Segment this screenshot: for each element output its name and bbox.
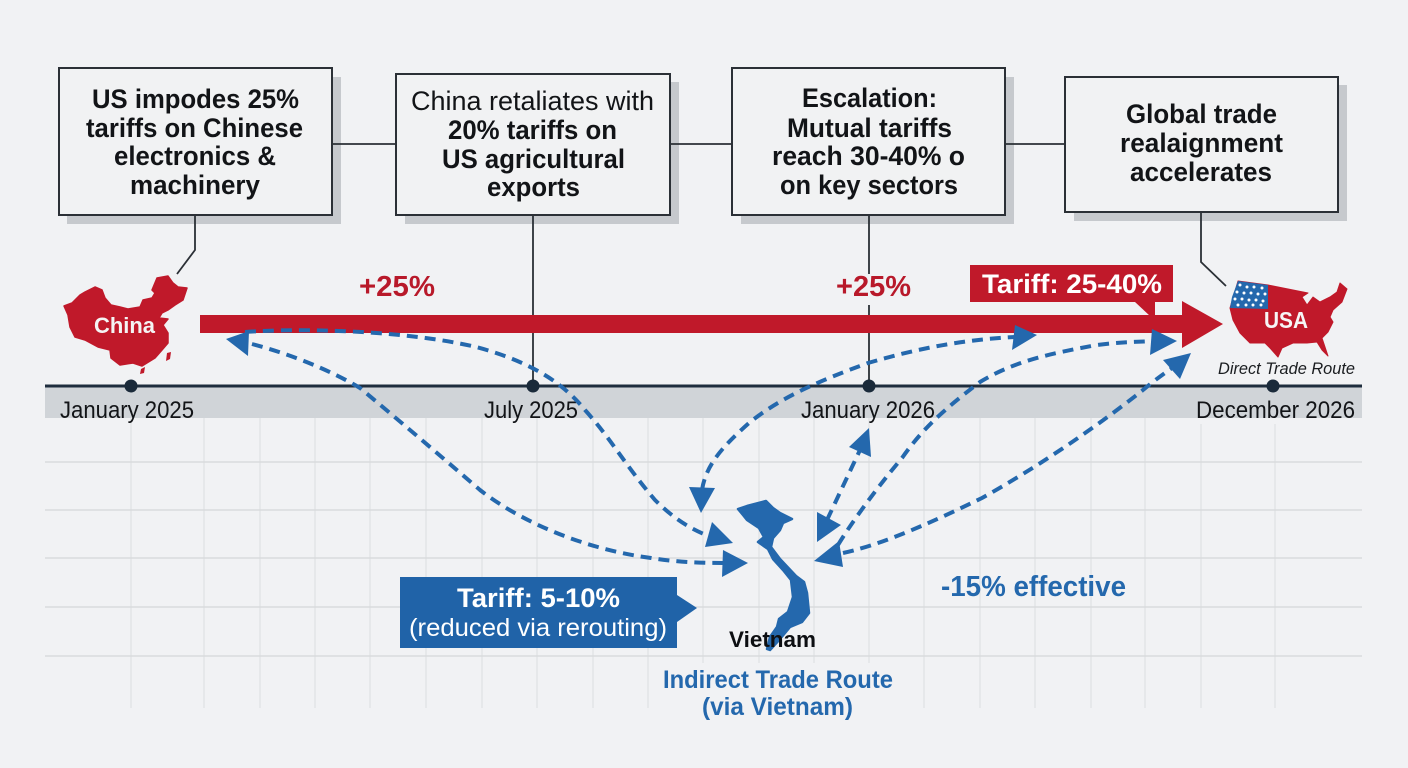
timeline label July 2025: July 2025	[484, 397, 578, 424]
event box 1: machinery	[130, 170, 260, 200]
timeline label December 2026: December 2026	[1196, 397, 1355, 424]
map: USA	[1230, 281, 1347, 357]
event box 2: exports	[487, 172, 580, 202]
tariff callout red	[970, 265, 1173, 316]
event box 1: US impodes 25%	[92, 84, 299, 114]
event box 3: on key sectors	[780, 170, 958, 200]
event box connectors	[177, 144, 1226, 380]
event box 3: reach 30-40% o	[772, 141, 965, 171]
indirect arrow: China to Vietnam lower	[252, 344, 748, 577]
event box 2: China retaliates with	[411, 86, 654, 116]
indirect arrow: Vietnam to direct route middle	[814, 329, 1177, 567]
event box 4: accelerates	[1130, 157, 1272, 187]
label: -15% effective: -15% effective	[941, 571, 1126, 603]
tariff callout red: Tariff: 25-40%	[982, 269, 1162, 299]
map: China: China	[94, 313, 156, 338]
label: direct trade route: Direct Trade Route	[1218, 360, 1355, 378]
label: Vietnam: Vietnam	[729, 627, 816, 652]
event box 1: electronics &	[114, 141, 276, 171]
timeline label January 2025: January 2025	[60, 397, 194, 424]
event box 1: tariffs on Chinese	[86, 113, 303, 143]
indirect arrow: Vietnam two-way short	[817, 428, 871, 542]
tariff callout blue	[400, 577, 697, 648]
event box 1	[59, 68, 341, 224]
event box 4: Global trade	[1126, 99, 1277, 129]
event box 3: Escalation:	[802, 83, 937, 113]
event box 2: 20% tariffs on	[448, 115, 617, 145]
event box 2: US agricultural	[442, 144, 625, 174]
indirect arrow: Vietnam to USA	[843, 353, 1191, 553]
event box 4	[1065, 77, 1347, 221]
timeline label January 2026: January 2026	[801, 397, 935, 424]
map: Vietnam	[738, 501, 809, 650]
event box 3: Mutual tariffs	[787, 113, 952, 143]
label: indirect trade route	[663, 666, 893, 721]
event box 2	[396, 74, 679, 224]
event box 3	[732, 68, 1014, 224]
map: China	[64, 276, 187, 374]
indirect arrow: China to Vietnam upper	[226, 330, 733, 547]
timeline band	[45, 387, 1362, 418]
label: indirect trade route: (via Vietnam)	[702, 693, 853, 721]
label: indirect trade route: Indirect Trade Route	[663, 666, 893, 694]
indirect arrow: Vietnam to direct route upper	[689, 325, 1037, 513]
map: USA: USA	[1264, 307, 1308, 333]
tariff callout blue: Tariff: 5-10%	[457, 583, 620, 613]
tariff callout blue: (reduced via rerouting)	[409, 614, 667, 642]
direct route red arrow	[200, 301, 1223, 348]
timeline axis	[45, 380, 1362, 392]
label: +25% second: +25%	[836, 271, 911, 303]
event box 4: realaignment	[1120, 128, 1283, 158]
label: +25% first: +25%	[359, 271, 435, 303]
